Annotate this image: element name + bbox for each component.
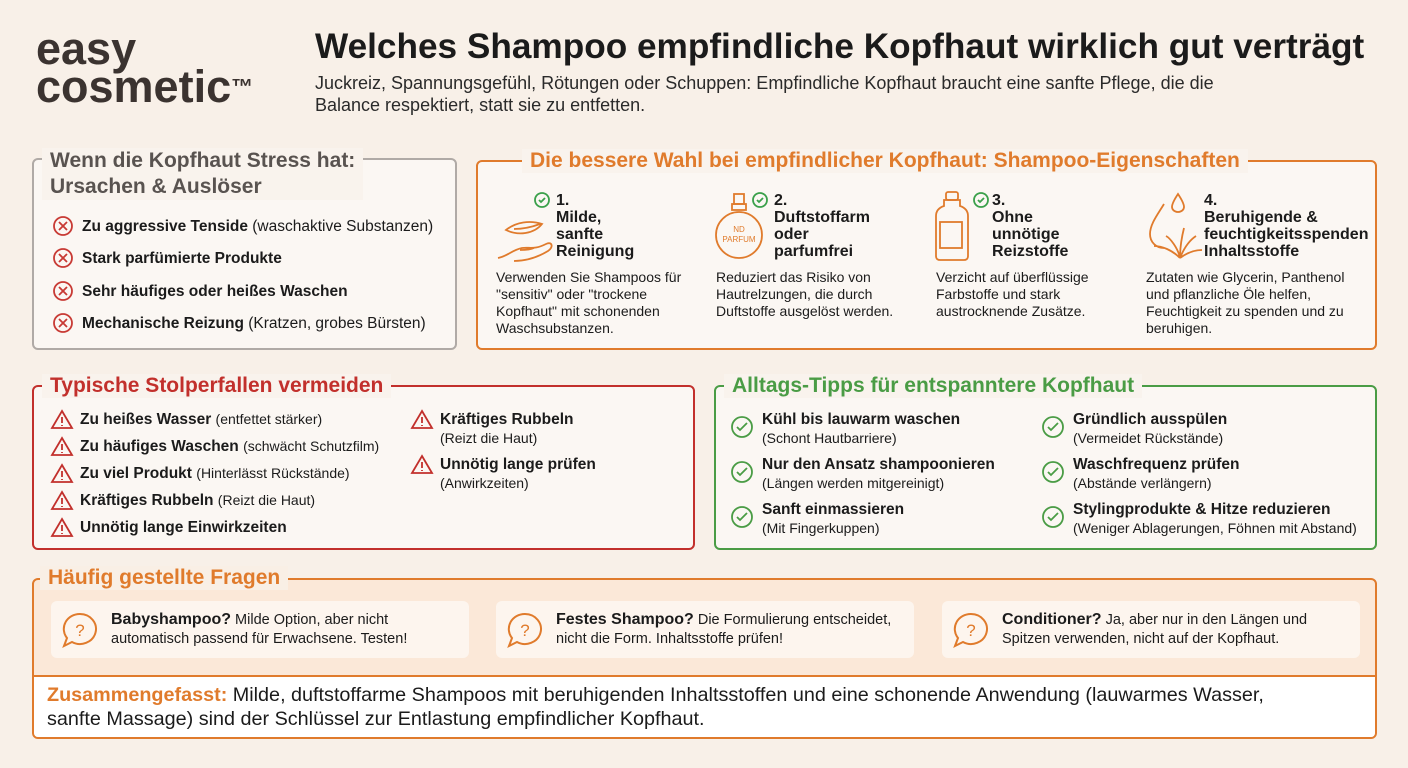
tips list: Gründlich ausspülen [1073,411,1227,428]
property 2: Duftstoffarm [774,209,870,226]
cause list: Stark parfümierte Produkte [82,250,282,267]
pitfall list: Kräftiges Rubbeln (Reizt die Haut) [80,492,315,509]
heading: causes: Ursachen & Auslöser [50,175,262,198]
tips list: (Weniger Ablagerungen, Föhnen mit Abstand) [1073,520,1357,536]
property 2: parfumfrei [774,243,853,260]
tips list: (Längen werden mitgereinigt) [762,475,944,491]
property 2: PARFUM [722,235,756,244]
tips list: (Abstände verlängern) [1073,475,1212,491]
heading: properties: Die bessere Wahl bei empfindlicher Kopfhaut: Shampoo-Eigenschaften [530,149,1240,172]
pitfall list: Kräftiges Rubbeln [440,411,573,428]
property 3: Ohne [992,209,1033,226]
summary [34,675,1375,737]
property 3: 3. [992,192,1005,209]
property 3: Verzicht auf überflüssige Farbstoffe und stark austrocknende Zusätze. [936,269,1089,319]
heading: causes: Wenn die Kopfhaut Stress hat: [50,149,355,172]
pitfall list: (Anwirkzeiten) [440,475,529,491]
heading: causes [42,148,363,200]
property 4: Inhaltsstoffe [1204,243,1299,260]
tips list: (Mit Fingerkuppen) [762,520,880,536]
property 4: 4. [1204,192,1217,209]
tips list: Nur den Ansatz shampoonieren [762,456,995,473]
panel: shampoo properties [476,160,1377,350]
FAQ card 1: ? [75,621,85,640]
property 3 [935,191,1089,319]
cause list: Sehr häufiges oder heißes Waschen [82,283,348,300]
FAQ card 3: Conditioner? Ja, aber nur in den Längen und Spitzen verwenden, nicht auf der Kopfhaut. [1002,611,1307,647]
tips list [731,411,1357,536]
tips list: Sanft einmassieren [762,501,904,518]
FAQ card 1 [51,601,469,658]
panel: tips [714,385,1377,550]
cause list: Mechanische Reizung (Kratzen, grobes Bürsten) [82,315,426,332]
property 2 [715,192,893,319]
property 1: 1. [556,192,569,209]
property 4 [1146,192,1368,336]
cause list [53,216,433,333]
logo: easy [36,23,136,74]
tips list: Waschfrequenz prüfen [1073,456,1240,473]
tips list: Kühl bis lauwarm waschen [762,411,960,428]
pitfall list: Unnötig lange prüfen [440,456,596,473]
pitfall list: Zu heißes Wasser (entfettet stärker) [80,411,322,428]
property 2: 2. [774,192,787,209]
property 4: Zutaten wie Glycerin, Panthenol und pflanzliche Öle helfen, Feuchtigkeit zu spenden und zu beruhigen. [1146,269,1344,336]
property 1: Verwenden Sie Shampoos für "sensitiv" oder "trockene Kopfhaut" mit schonenden Waschsubstanzen. [496,269,681,336]
property 1: Milde, [556,209,601,226]
FAQ card 3: ? [966,621,976,640]
property 4: feuchtigkeitsspenden [1204,226,1368,243]
logo [36,23,253,112]
panel: FAQ and summary [32,578,1377,739]
FAQ card 2 [496,601,914,658]
pitfall list: Unnötig lange Einwirkzeiten [80,519,287,536]
heading: tips: Alltags-Tipps für entspanntere Kopfhaut [732,374,1134,397]
pitfall list: Zu häufiges Waschen (schwächt Schutzfilm) [80,438,379,455]
FAQ card 3 [942,601,1360,658]
FAQ card 2: ? [520,621,530,640]
pitfall list [50,409,596,537]
tips list: (Schont Hautbarriere) [762,430,897,446]
property 1 [496,192,682,336]
summary: Zusammengefasst: Milde, duftstoffarme Shampoos mit beruhigenden Inhaltsstoffen und eine schonende Anwendung (lauwarmes Wasser, [47,684,1264,706]
property 3: Reizstoffe [992,243,1068,260]
property 4: Beruhigende & [1204,209,1318,226]
property 2: oder [774,226,809,243]
title: Welches Shampoo empfindliche Kopfhaut wirklich gut verträgt [315,27,1364,66]
property 2: Reduziert das Risiko von Hautrelzungen, die durch Duftstoffe ausgelöst werden. [716,269,893,319]
subtitle: Juckreiz, Spannungsgefühl, Rötungen oder Schuppen: Empfindliche Kopfhaut braucht eine sanfte Pflege, die die Balance respektiert, statt sie zu entfetten. [315,73,1214,115]
cause list: Zu aggressive Tenside (waschaktive Substanzen) [82,218,433,235]
tips list: (Vermeidet Rückstände) [1073,430,1223,446]
summary: sanfte Massage) sind der Schlüssel zur Entlastung empfindlicher Kopfhaut. [47,708,705,730]
property 1: sanfte [556,226,603,243]
heading: FAQ: Häufig gestellte Fragen [48,566,280,589]
tips list: Stylingprodukte & Hitze reduzieren [1073,501,1331,518]
FAQ card 1: Babyshampoo? Milde Option, aber nicht automatisch passend für Erwachsene. Testen! [111,611,407,647]
property 2: ND [733,225,745,234]
heading: pitfalls: Typische Stolperfallen vermeiden [50,374,383,397]
pitfall list: (Reizt die Haut) [440,430,537,446]
panel: pitfalls [32,385,695,550]
panel: causes [32,158,457,350]
pitfall list: Zu viel Produkt (Hinterlässt Rückstände) [80,465,350,482]
logo: cosmetic™ [36,61,253,112]
property 3: unnötige [992,226,1060,243]
FAQ card 2: Festes Shampoo? Die Formulierung entscheidet, nicht die Form. Inhaltsstoffe prüfen! [556,611,891,647]
property 1: Reinigung [556,243,634,260]
